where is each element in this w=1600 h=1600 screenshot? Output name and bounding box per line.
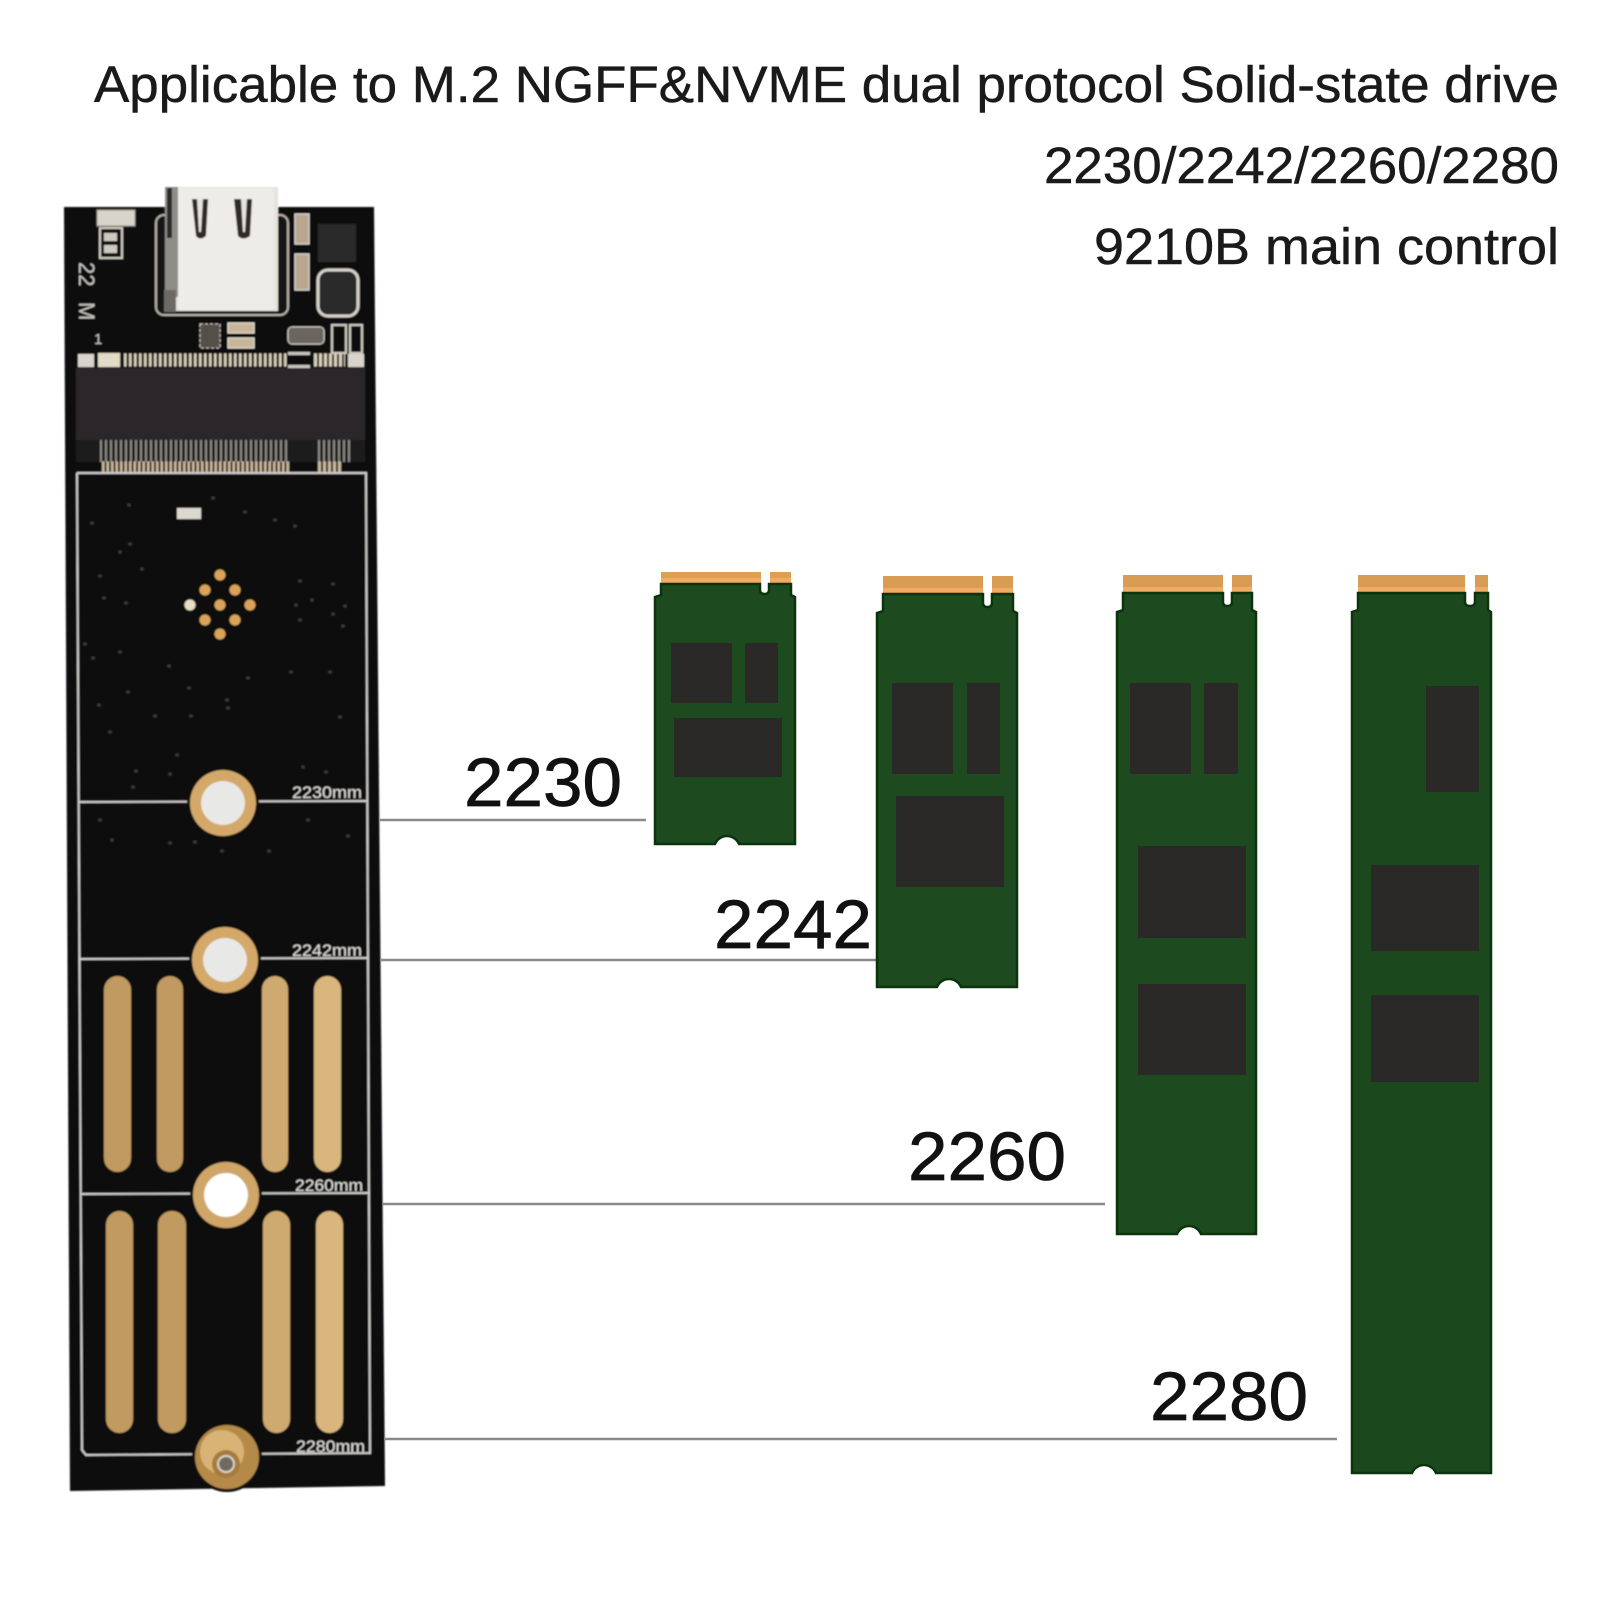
label: 2230: 2230 xyxy=(464,744,622,821)
leader lines from board to drives xyxy=(380,820,1337,1439)
memory chips xyxy=(671,643,782,777)
mounting hole 2260 xyxy=(190,1159,262,1231)
length marker outline xyxy=(77,473,370,1455)
drive: 2280 SSD xyxy=(1352,575,1491,1473)
size labels xyxy=(464,744,1308,1435)
scattered vias xyxy=(83,496,350,853)
gold contacts xyxy=(1358,575,1488,593)
gold heat-sink strips, upper group xyxy=(104,976,341,1172)
label: 2280: 2280 xyxy=(1150,1358,1308,1435)
board size labels: 2280mm xyxy=(296,1437,365,1456)
board size labels: 2230mm xyxy=(292,783,362,802)
gold contacts xyxy=(883,576,1013,594)
gold heat-sink strips, lower group xyxy=(106,1211,343,1433)
silkscreen marks: M xyxy=(74,302,99,320)
M.2 socket xyxy=(76,352,365,467)
memory chips xyxy=(1371,686,1479,1082)
silkscreen marks: 22 xyxy=(74,262,99,286)
drive: 2260 SSD xyxy=(1117,575,1256,1234)
mounting hole 2242 xyxy=(189,924,261,996)
spec line: supported lengths: 2230/2242/2260/2280 xyxy=(1044,137,1559,194)
gold contacts xyxy=(661,572,791,584)
label: 2242: 2242 xyxy=(714,886,872,963)
gold contacts xyxy=(1123,575,1252,593)
memory chips xyxy=(1130,683,1246,1075)
small white pad xyxy=(177,508,201,519)
test point via cluster xyxy=(184,568,256,640)
mounting hole 2230 xyxy=(187,767,259,839)
title line: applicable drives: Applicable to M.2 NGFF&NVME dual protocol Solid-state drive xyxy=(94,56,1559,113)
board size labels: 2260mm xyxy=(295,1176,363,1195)
silkscreen marks: 1 xyxy=(94,331,102,348)
board size labels: 2242mm xyxy=(292,941,362,960)
drive: 2242 SSD xyxy=(877,576,1017,987)
spec line: main control: 9210B main control xyxy=(1094,218,1559,275)
memory chips xyxy=(892,683,1004,887)
USB-C connector xyxy=(156,187,288,315)
heading: product title and specs xyxy=(94,56,1559,275)
drive: 2230 SSD xyxy=(655,572,795,844)
board body xyxy=(64,207,385,1491)
mounting screw 2280 xyxy=(192,1422,262,1492)
silkscreen marks xyxy=(74,262,102,348)
label: 2260: 2260 xyxy=(908,1118,1066,1195)
small surface-mount components xyxy=(97,210,362,353)
panel: adapter circuit board xyxy=(64,187,385,1492)
board size labels xyxy=(292,783,365,1456)
